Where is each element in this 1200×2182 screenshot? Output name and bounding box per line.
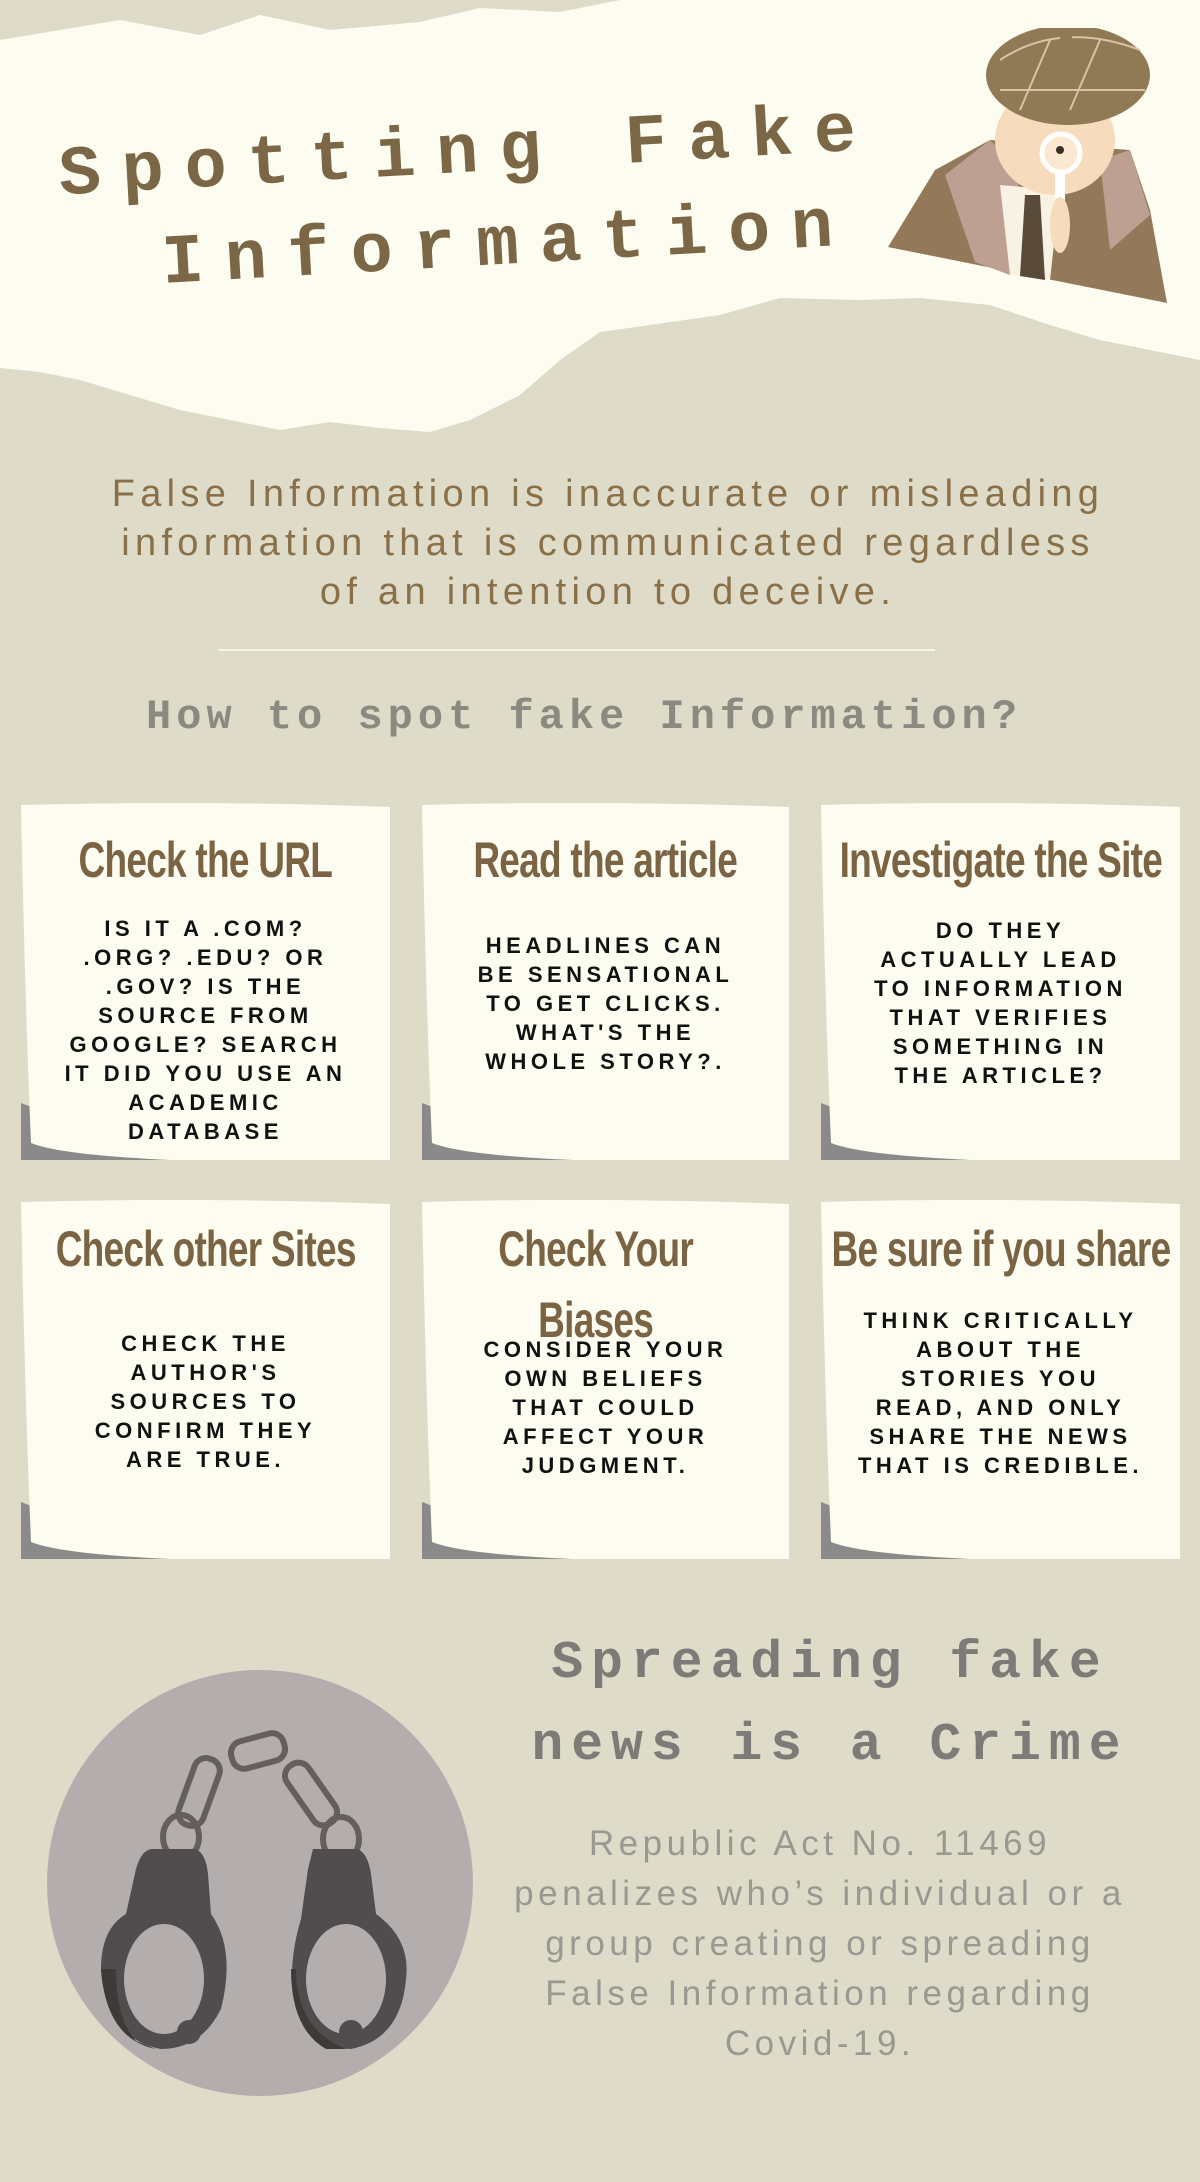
card body: SOMETHING IN xyxy=(893,1034,1108,1059)
card body: .ORG? .EDU? OR xyxy=(84,945,327,970)
card body: ARE TRUE. xyxy=(126,1447,285,1472)
card body: CHECK THE xyxy=(121,1331,290,1356)
card body: AFFECT YOUR xyxy=(503,1424,708,1449)
title: Spotting Fake xyxy=(57,92,879,216)
card body: JUDGMENT. xyxy=(522,1453,689,1478)
definition text: of an intention to deceive. xyxy=(320,571,896,613)
card body: WHAT'S THE xyxy=(516,1020,695,1045)
card body xyxy=(478,933,733,1074)
card title: Read the article xyxy=(474,832,737,888)
card body: TO INFORMATION xyxy=(874,976,1127,1001)
panel: check other sites xyxy=(21,1200,390,1559)
card body: SOURCES TO xyxy=(110,1389,301,1414)
law text: False Information regarding xyxy=(545,1974,1095,2013)
card body: THAT COULD xyxy=(512,1395,699,1420)
card body xyxy=(874,918,1127,1088)
heading: spreading fake news is a crime: Spreading fake xyxy=(551,1633,1109,1693)
icon: handcuffs in circle xyxy=(47,1670,473,2096)
title: Information xyxy=(160,187,856,305)
card body: ABOUT THE xyxy=(916,1337,1085,1362)
card body: THAT IS CREDIBLE. xyxy=(858,1453,1143,1478)
definition text xyxy=(112,473,1104,613)
card body xyxy=(65,916,346,1144)
card body: CONSIDER YOUR xyxy=(484,1337,727,1362)
card title: Investigate the Site xyxy=(839,832,1162,888)
law text: Covid-19. xyxy=(725,2024,915,2063)
card body: ACTUALLY LEAD xyxy=(880,947,1121,972)
torn paper header xyxy=(0,0,1200,432)
card title xyxy=(498,1221,694,1348)
law text xyxy=(514,1824,1126,2063)
panel: investigate the site xyxy=(821,803,1180,1160)
card body: IT DID YOU USE AN xyxy=(65,1061,346,1086)
card title: Biases xyxy=(538,1292,653,1348)
title xyxy=(57,92,879,305)
law text: penalizes who’s individual or a xyxy=(514,1874,1126,1913)
card body: TO GET CLICKS. xyxy=(486,991,725,1016)
card title: Check the URL xyxy=(79,832,332,888)
card body: IS IT A .COM? xyxy=(104,916,307,941)
card body xyxy=(95,1331,316,1472)
card body: DO THEY xyxy=(936,918,1065,943)
card body: ACADEMIC xyxy=(128,1090,283,1115)
card body: WHOLE STORY?. xyxy=(485,1049,726,1074)
icon: detective with magnifier xyxy=(888,28,1167,303)
card body: SOURCE FROM xyxy=(98,1003,313,1028)
law text: group creating or spreading xyxy=(545,1924,1095,1963)
card body: .GOV? IS THE xyxy=(106,974,305,999)
card body: SHARE THE NEWS xyxy=(869,1424,1132,1449)
card body: THAT VERIFIES xyxy=(890,1005,1111,1030)
card body xyxy=(484,1337,727,1478)
card body: OWN BELIEFS xyxy=(504,1366,707,1391)
heading: spreading fake news is a crime: news is a Crime xyxy=(531,1715,1129,1775)
panel: check the URL xyxy=(21,803,390,1160)
card body: CONFIRM THEY xyxy=(95,1418,316,1443)
card title: Be sure if you share xyxy=(831,1221,1170,1277)
heading: spreading fake news is a crime xyxy=(531,1633,1129,1775)
definition text: False Information is inaccurate or misleading xyxy=(112,473,1104,515)
card body: THINK CRITICALLY xyxy=(863,1308,1138,1333)
definition text: information that is communicated regardless xyxy=(121,522,1095,564)
card body xyxy=(858,1308,1143,1478)
card body: GOOGLE? SEARCH xyxy=(69,1032,342,1057)
card title: Check other Sites xyxy=(56,1221,355,1277)
card body: AUTHOR'S xyxy=(130,1360,280,1385)
card body: THE ARTICLE? xyxy=(894,1063,1107,1088)
card body: STORIES YOU xyxy=(901,1366,1100,1391)
subheading: How to spot fake Information? xyxy=(146,693,1022,741)
law text: Republic Act No. 11469 xyxy=(589,1824,1051,1863)
card body: READ, AND ONLY xyxy=(876,1395,1125,1420)
panel: read the article xyxy=(422,803,1166,1559)
card body: BE SENSATIONAL xyxy=(478,962,733,987)
card title: Check Your xyxy=(498,1221,693,1277)
panel: check your biases xyxy=(422,1200,789,1559)
card body: HEADLINES CAN xyxy=(486,933,725,958)
card body: DATABASE xyxy=(128,1119,283,1144)
panel: be sure if you share xyxy=(821,1200,1180,1559)
